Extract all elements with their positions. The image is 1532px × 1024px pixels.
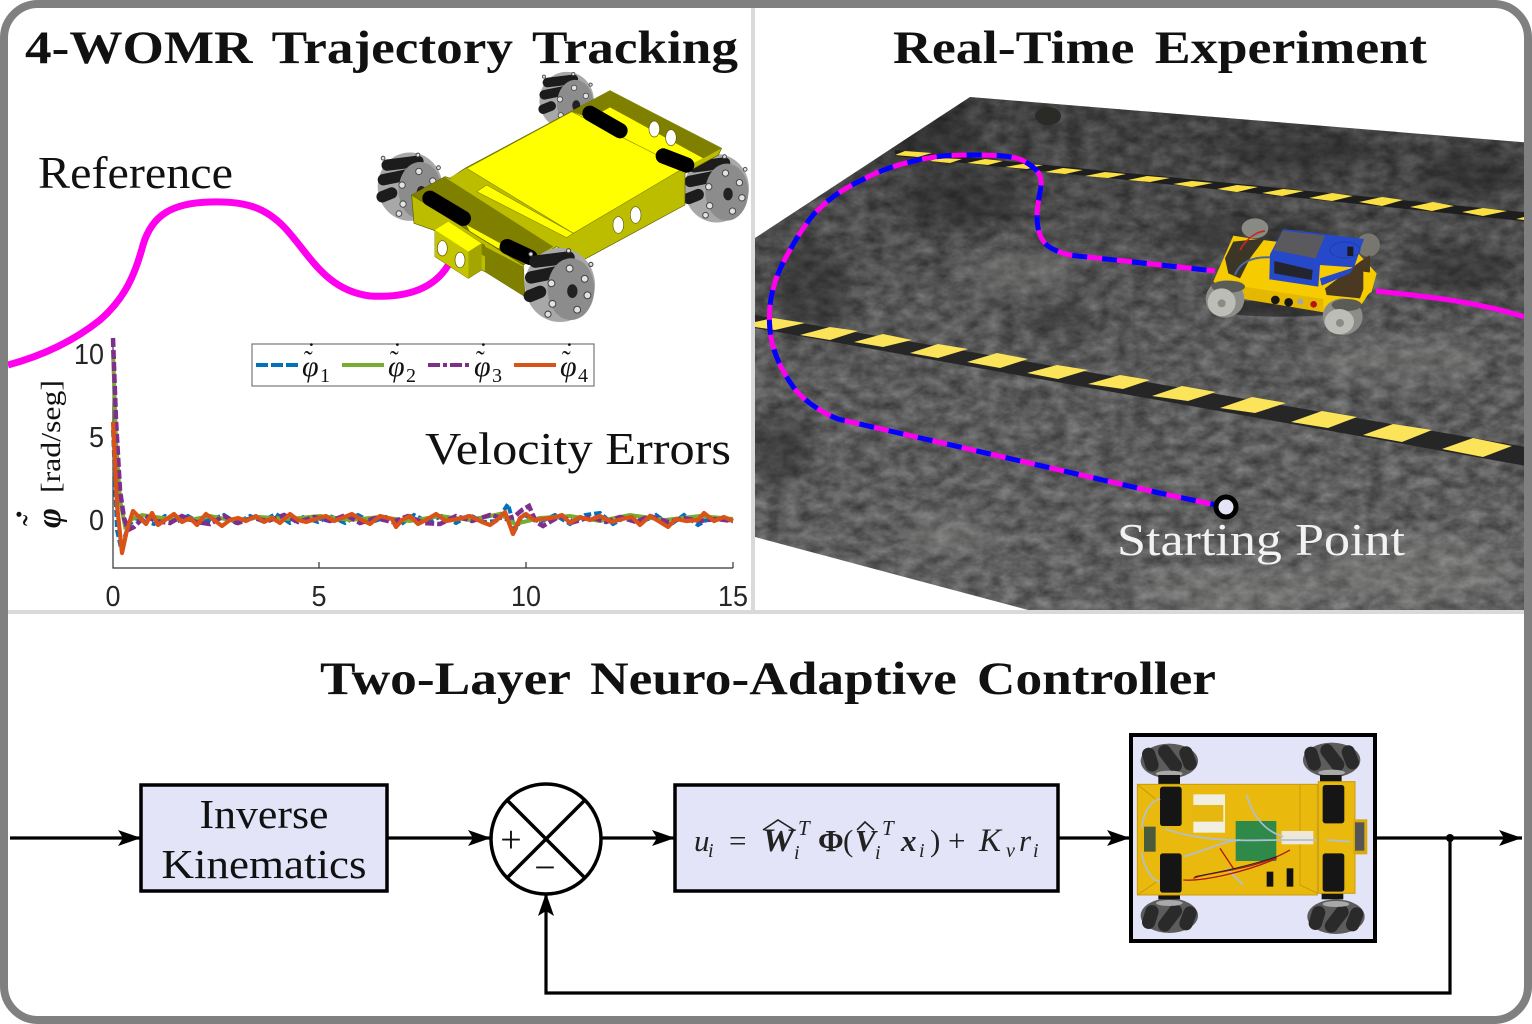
legend: 4 bbox=[578, 365, 588, 387]
y tick labels: 10 bbox=[74, 339, 104, 371]
block: control law formula: K bbox=[978, 823, 1003, 859]
chart axes bbox=[113, 338, 733, 568]
dark debris spot bbox=[1035, 107, 1061, 125]
series: blue error 1 bbox=[113, 430, 733, 548]
tape: lower hazard stripe bbox=[755, 315, 1532, 467]
block: control law formula: Φ bbox=[818, 823, 844, 858]
block: control law formula: i bbox=[919, 840, 925, 862]
title: two-layer neuro-adaptive controller: Two-Layer Neuro-Adaptive Controller bbox=[320, 653, 1216, 705]
summing junction: + bbox=[500, 819, 522, 861]
block: inverse kinematics: Kinematics bbox=[162, 841, 366, 887]
block: control law formula: x bbox=[900, 823, 916, 858]
block: control law formula bbox=[675, 785, 1058, 891]
legend: ˙ bbox=[393, 338, 402, 367]
y axis label: φ bbox=[31, 508, 68, 528]
legend: ˙ bbox=[307, 338, 316, 367]
starting point marker bbox=[1216, 497, 1236, 517]
x tick labels: 15 bbox=[718, 581, 748, 613]
legend: ˜ bbox=[390, 346, 399, 375]
signal arrows bbox=[10, 838, 1522, 993]
title: real-time experiment: Real-Time Experiment bbox=[893, 22, 1427, 74]
block: inverse kinematics: Inverse bbox=[200, 791, 328, 837]
legend: 2 bbox=[406, 365, 416, 387]
series: purple error 3 bbox=[113, 338, 733, 530]
trajectory path on floor bbox=[769, 155, 1525, 507]
legend: ˙ bbox=[565, 338, 574, 367]
legend: φ bbox=[560, 350, 577, 383]
block: control law formula: u bbox=[694, 823, 710, 858]
wheels behind body bbox=[378, 72, 749, 223]
block: control law formula: ( bbox=[843, 823, 853, 858]
legend: ˜ bbox=[562, 346, 571, 375]
block: robot photograph bbox=[1131, 735, 1375, 941]
block: control law formula: T bbox=[798, 816, 811, 840]
block: control law formula: = bbox=[729, 823, 746, 858]
label: velocity errors: Velocity Errors bbox=[425, 423, 731, 474]
legend: ˙ bbox=[479, 338, 488, 367]
tape: upper hazard stripe bbox=[895, 150, 1532, 222]
legend: φ bbox=[302, 350, 319, 383]
legend: 3 bbox=[492, 365, 502, 387]
x tick labels: 10 bbox=[511, 581, 541, 613]
legend: 1 bbox=[320, 365, 330, 387]
series: green error 2 bbox=[113, 350, 733, 526]
block: control law formula: i bbox=[708, 840, 714, 862]
y axis label: [rad/seg] bbox=[36, 380, 66, 493]
y tick labels: 0 bbox=[89, 505, 104, 537]
y axis label: ˜ bbox=[17, 514, 54, 526]
legend: φ bbox=[474, 350, 491, 383]
summing junction bbox=[491, 784, 601, 894]
x tick labels: 5 bbox=[312, 581, 326, 613]
panel: real-time experiment photograph bbox=[750, 97, 1532, 615]
starting point label: Starting Point bbox=[1117, 514, 1405, 565]
block: control law formula: T bbox=[882, 816, 895, 840]
series: orange error 4 bbox=[113, 422, 733, 553]
y tick labels bbox=[74, 339, 104, 537]
block: control law formula: W bbox=[762, 823, 797, 859]
label: reference: Reference bbox=[38, 147, 233, 198]
y tick labels: 5 bbox=[89, 422, 104, 454]
block: control law formula: i bbox=[1033, 840, 1039, 862]
block: control law formula: ) bbox=[930, 823, 940, 858]
title: 4-WOMR trajectory tracking: 4-WOMR Trajectory Tracking bbox=[25, 22, 739, 74]
legend: ˜ bbox=[304, 346, 313, 375]
block: inverse kinematics bbox=[141, 785, 387, 891]
y axis label: ˙ bbox=[11, 509, 48, 520]
block: control law formula: r bbox=[1019, 823, 1032, 858]
summing junction: − bbox=[534, 847, 556, 889]
reference trajectory curve bbox=[8, 202, 450, 365]
velocity errors chart bbox=[11, 338, 748, 613]
y axis label bbox=[11, 380, 68, 528]
legend bbox=[252, 338, 594, 387]
blue electronics cover bbox=[1269, 229, 1364, 287]
block: control law formula: v bbox=[1006, 840, 1015, 862]
CAD model of 4-wheel omnidirectional robot bbox=[378, 72, 749, 322]
legend: φ bbox=[388, 350, 405, 383]
block: control law formula: i bbox=[794, 842, 800, 864]
block: control law formula: V bbox=[855, 823, 878, 858]
block: control law formula: + bbox=[948, 823, 965, 858]
feedback branch node bbox=[1446, 834, 1454, 842]
legend: ˜ bbox=[476, 346, 485, 375]
x tick labels bbox=[106, 581, 748, 613]
x tick labels: 0 bbox=[106, 581, 120, 613]
block: control law formula: i bbox=[875, 842, 881, 864]
photo: mecanum robot on floor bbox=[1206, 218, 1380, 335]
